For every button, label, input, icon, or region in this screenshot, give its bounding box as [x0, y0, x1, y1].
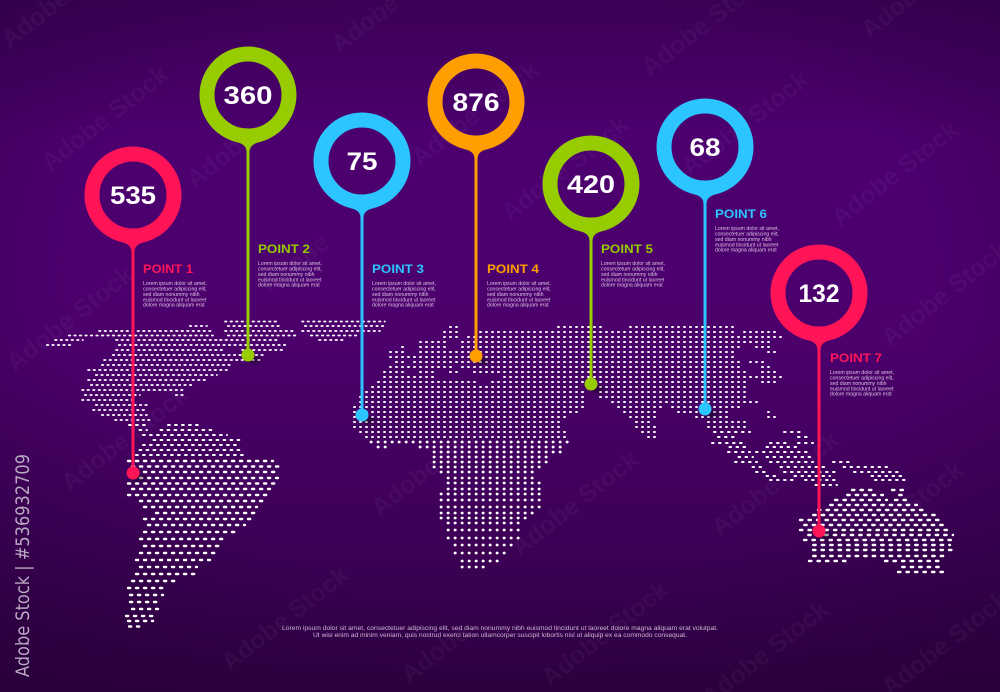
marker 3: [356, 408, 368, 422]
description 7: sed diam nonummy nibh: [830, 381, 887, 387]
description 3: sed diam nonummy nibh: [372, 292, 429, 298]
marker shadow 5: [590, 386, 604, 392]
ring 2: [207, 54, 289, 136]
watermark: Adobe Stock: [406, 56, 544, 172]
description 7: euismod tincidunt ut laoreet: [830, 386, 894, 392]
label 2: POINT 2: [258, 244, 310, 256]
marker 4: [470, 350, 482, 362]
description 4: euismod tincidunt ut laoreet: [487, 297, 551, 303]
pin 4: [435, 61, 551, 364]
description 1: consectetuer adipiscing elit,: [143, 286, 207, 292]
watermark: Adobe: [181, 124, 259, 194]
description 2: euismod tincidunt ut laoreet: [258, 277, 322, 283]
pin 5: [550, 143, 665, 392]
marker shadow 3: [361, 417, 375, 423]
map: north america and greenland: [47, 322, 385, 420]
stem 7: [807, 340, 831, 531]
description 6: dolore magna aliquam erat: [715, 248, 777, 254]
description 5: sed diam nonummy nibh: [601, 272, 658, 278]
label 3: POINT 3: [372, 264, 424, 276]
description 4: Lorem ipsum dolor sit amet,: [487, 281, 551, 287]
watermark: Adobe Stock: [216, 561, 354, 677]
description 6: euismod tincidunt ut laoreet: [715, 242, 779, 248]
watermark: Adobe: [196, 459, 274, 529]
description 3: dolore magna aliquam erat: [372, 302, 434, 308]
watermark: Adobe Stock: [536, 576, 674, 692]
watermark: Adobe Stock: [496, 111, 634, 227]
footer text: Ut wisi enim ad minim veniam, quis nostrud exerci tation ullamcorper suscipit lobortis nisl ut aliquip ex ea commodo consequat.: [313, 632, 687, 639]
marker 7: [812, 524, 826, 538]
marker shadow 4: [475, 358, 489, 364]
value 1: 535: [110, 182, 156, 210]
pin 1: [92, 154, 207, 481]
watermark: Adobe Stock: [56, 381, 194, 497]
description 5: Lorem ipsum dolor sit amet,: [601, 261, 665, 267]
ring 3: [321, 120, 403, 202]
ring 4: [435, 61, 517, 143]
watermark: Adobe Stock: [676, 66, 814, 182]
description 6: sed diam nonummy nibh: [715, 237, 772, 243]
marker 2: [242, 348, 254, 362]
description 2: Lorem ipsum dolor sit amet,: [258, 261, 322, 267]
description 3: consectetuer adipiscing elit,: [372, 286, 436, 292]
watermark: Adobe Stock: [366, 406, 504, 522]
stock id side text: Adobe Stock | #536932709: [12, 454, 34, 677]
watermark: Adobe Stock: [36, 61, 174, 177]
label 5: POINT 5: [601, 244, 654, 256]
marker 1: [126, 466, 140, 480]
description 3: Lorem ipsum dolor sit amet,: [372, 281, 436, 287]
stem 6: [693, 194, 717, 409]
ring 6: [664, 106, 746, 188]
description 7: Lorem ipsum dolor sit amet,: [830, 370, 894, 376]
description 4: consectetuer adipiscing elit,: [487, 286, 551, 292]
watermark: Adobe: [396, 619, 474, 689]
description 2: consectetuer adipiscing elit,: [258, 266, 322, 272]
marker 5: [584, 378, 598, 390]
marker shadow 6: [704, 411, 718, 417]
label 1: POINT 1: [143, 264, 194, 276]
value 2: 360: [224, 82, 272, 110]
ring 7: [778, 252, 860, 334]
value 7: 132: [798, 280, 840, 308]
watermark: Adobe Stock: [1, 261, 139, 377]
description 1: Lorem ipsum dolor sit amet,: [143, 281, 207, 287]
map: south east asia and islands: [712, 432, 910, 485]
description 7: dolore magna aliquam erat: [830, 392, 892, 398]
map: central and south america: [129, 425, 243, 455]
footer text: Lorem ipsum dolor sit amet, consectetuer adipiscing elit, sed diam nonummy nibh euismod tincidunt ut laoreet dolore magna aliquam erat volutpat.: [282, 625, 718, 632]
stem 5: [579, 231, 603, 384]
description 5: euismod tincidunt ut laoreet: [601, 277, 665, 283]
description 3: euismod tincidunt ut laoreet: [372, 297, 436, 303]
description 1: dolore magna aliquam erat: [143, 302, 205, 308]
description 6: Lorem ipsum dolor sit amet,: [715, 226, 779, 232]
pin 7: [778, 252, 894, 539]
description 2: dolore magna aliquam erat: [258, 282, 320, 288]
label 6: POINT 6: [715, 209, 767, 221]
description 5: dolore magna aliquam erat: [601, 282, 663, 288]
value 4: 876: [452, 89, 500, 117]
description 2: sed diam nonummy nibh: [258, 272, 315, 278]
value 5: 420: [567, 171, 615, 199]
label 7: POINT 7: [830, 353, 882, 365]
ring 5: [550, 143, 632, 225]
dotted world map: [47, 322, 953, 626]
map: southern africa: [371, 442, 568, 567]
pin 3: [321, 120, 436, 423]
description 7: consectetuer adipiscing elit,: [830, 376, 894, 382]
watermark: Adobe: [256, 229, 334, 299]
pin 2: [207, 54, 322, 363]
stem 4: [464, 149, 488, 356]
description 5: consectetuer adipiscing elit,: [601, 266, 665, 272]
value 3: 75: [346, 148, 378, 176]
value 6: 68: [690, 134, 721, 162]
marker shadow 1: [132, 475, 146, 481]
watermark: Adobe Stock: [706, 426, 844, 542]
watermark: Adobe Stock: [506, 446, 644, 562]
watermark: Adobe Stock: [826, 116, 964, 232]
description 4: dolore magna aliquam erat: [487, 302, 549, 308]
label 4: POINT 4: [487, 264, 540, 276]
description 6: consectetuer adipiscing elit,: [715, 232, 779, 238]
stem 1: [121, 242, 145, 473]
watermark: Adobe Stock: [831, 456, 969, 572]
map: australia: [800, 490, 953, 572]
description 1: sed diam nonummy nibh: [143, 292, 200, 298]
stem 3: [350, 208, 374, 415]
marker 6: [698, 402, 712, 416]
ring 1: [92, 154, 174, 236]
description 4: sed diam nonummy nibh: [487, 292, 544, 298]
marker shadow 2: [247, 357, 261, 363]
stem 2: [236, 142, 260, 355]
description 1: euismod tincidunt ut laoreet: [143, 297, 207, 303]
pin 6: [664, 106, 779, 417]
marker shadow 7: [818, 533, 832, 539]
map: eurasia and north africa: [354, 327, 785, 437]
